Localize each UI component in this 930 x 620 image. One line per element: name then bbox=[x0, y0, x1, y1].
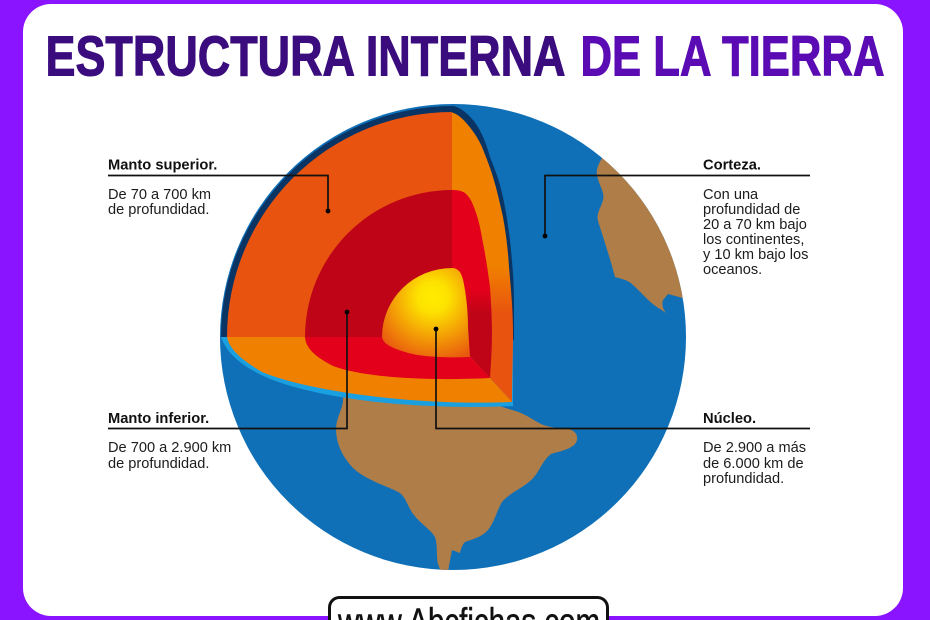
lower mantle: cut face right bbox=[452, 190, 492, 378]
callout: nucleo bbox=[434, 327, 810, 487]
ocean sphere bbox=[220, 104, 686, 570]
callout: nucleo: De 2.900 a más bbox=[703, 440, 806, 456]
earth globe diagram bbox=[220, 104, 690, 572]
callout: corteza: Corteza. bbox=[703, 158, 761, 174]
callout: corteza: los continentes, bbox=[703, 232, 804, 248]
callout: corteza: Con una bbox=[703, 187, 759, 203]
callout: manto superior bbox=[108, 158, 330, 218]
callout: manto superior: Manto superior. bbox=[108, 158, 217, 174]
lower mantle: cut face left bbox=[305, 190, 452, 337]
website badge bbox=[330, 598, 608, 620]
continent: upper right bbox=[596, 158, 683, 313]
callout: manto inferior: De 700 a 2.900 km bbox=[108, 440, 231, 456]
upper mantle: cut face left bbox=[227, 112, 452, 337]
callout: nucleo: de 6.000 km de bbox=[703, 456, 804, 472]
callout: manto inferior: de profundidad. bbox=[108, 456, 209, 472]
callout: corteza: y 10 km bajo los bbox=[703, 247, 808, 263]
callout: corteza: 20 a 70 km bajo bbox=[703, 217, 807, 233]
cut: dark crust edge bbox=[221, 106, 514, 340]
callout: manto superior: De 70 a 700 km bbox=[108, 187, 211, 203]
upper mantle: cut face bottom bbox=[227, 337, 512, 403]
callout: manto inferior bbox=[108, 310, 349, 472]
callout: nucleo: Núcleo. bbox=[703, 411, 756, 427]
upper mantle: cut face right bbox=[452, 112, 513, 402]
title: ESTRUCTURA INTERNA bbox=[46, 24, 566, 88]
lower mantle: cut face bottom bbox=[305, 337, 490, 379]
cut: ocean stripe bbox=[221, 337, 513, 407]
callout: corteza bbox=[543, 158, 810, 278]
callout: manto superior: de profundidad. bbox=[108, 202, 209, 218]
callout: manto inferior: Manto inferior. bbox=[108, 411, 209, 427]
callout: corteza: oceanos. bbox=[703, 262, 762, 278]
inner core bbox=[382, 268, 470, 357]
callout: nucleo: profundidad. bbox=[703, 471, 784, 487]
callout: corteza: profundidad de bbox=[703, 202, 800, 218]
continent: lower bbox=[336, 396, 577, 572]
